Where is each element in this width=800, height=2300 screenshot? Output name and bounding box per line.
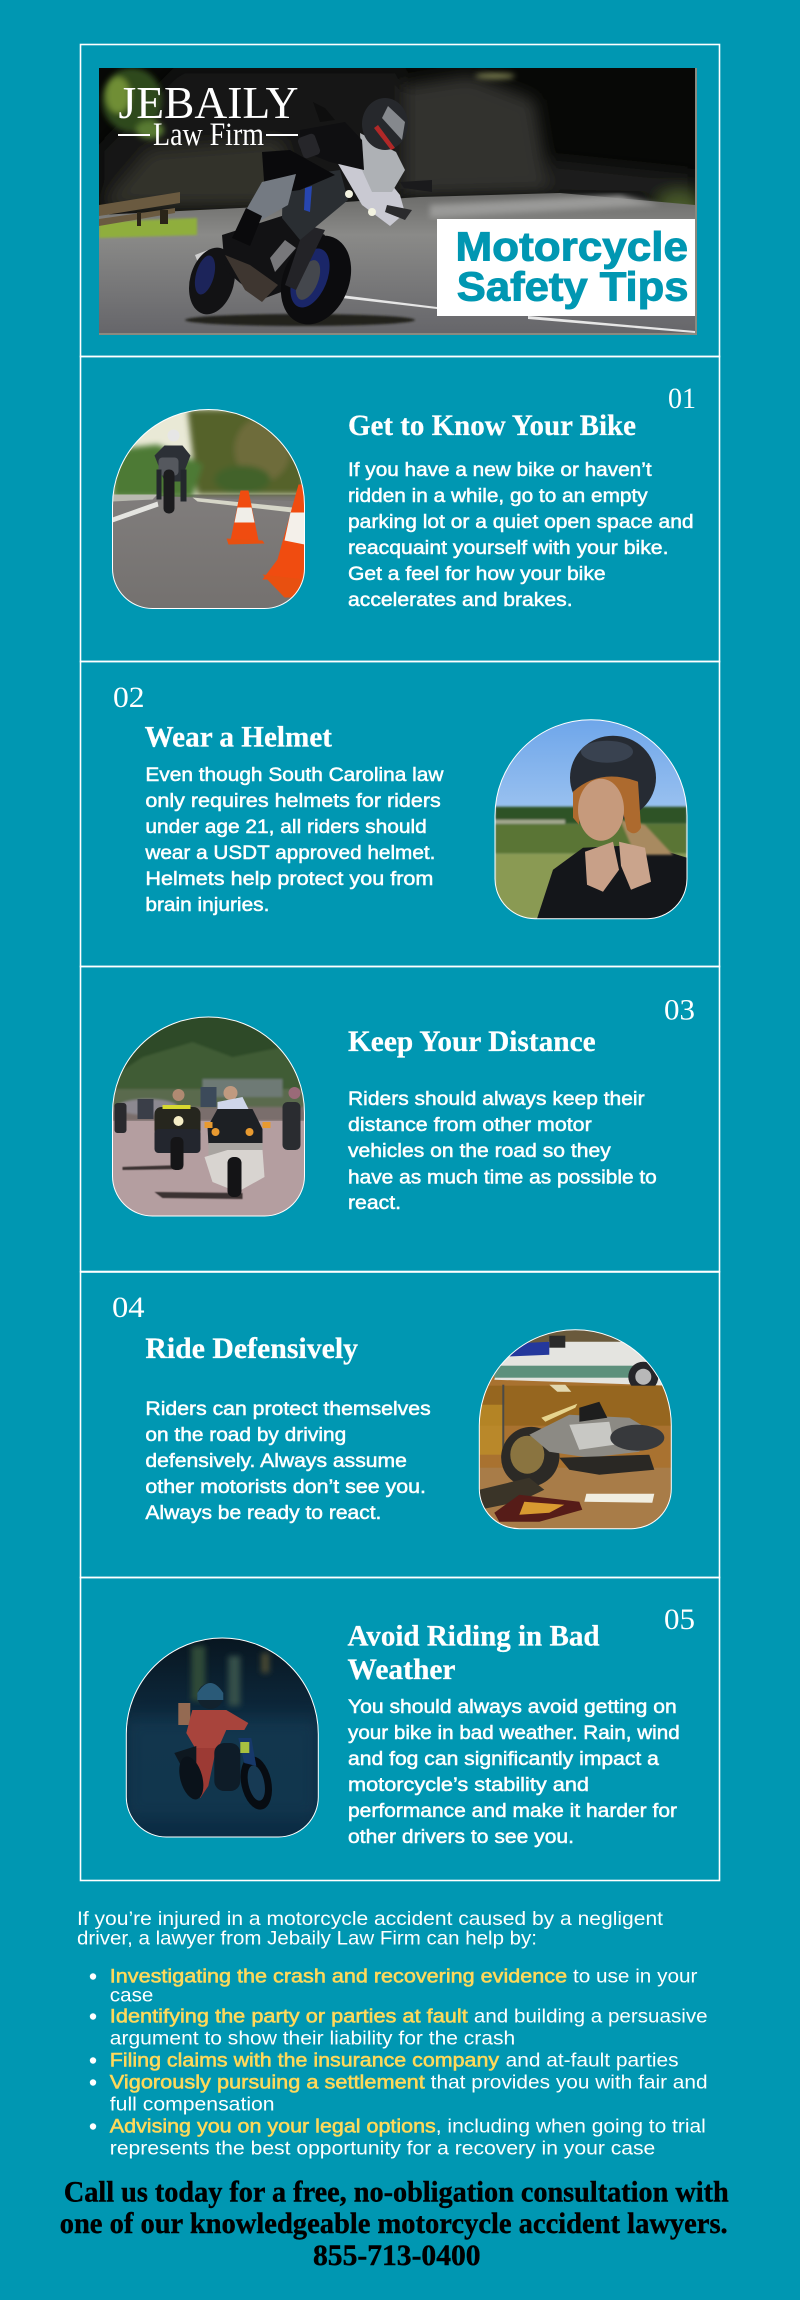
list item 5: , including when going to trial <box>436 2115 706 2137</box>
panel: header <box>80 44 720 356</box>
list item 2: argument to show their liability for the crash <box>110 2027 515 2049</box>
photo: group of motorcycles on the road <box>112 1017 304 1216</box>
body text: Helmets help protect you from <box>145 868 433 890</box>
body text: performance and make it harder for <box>348 1800 678 1822</box>
body text: If you have a new bike or haven’t <box>348 459 652 481</box>
body text: and fog can significantly impact a <box>348 1748 659 1770</box>
list item 1: Investigating the crash and recovering evidence <box>110 1965 567 1987</box>
call to action: 855-713-0400 <box>313 2240 481 2272</box>
intro paragraph: driver, a lawyer from Jebaily Law Firm can help by: <box>77 1927 537 1949</box>
panel: tip 3 <box>80 966 720 1272</box>
heading <box>348 1621 600 1686</box>
call to action: Call us today for a free, no-obligation consultation with <box>64 2177 729 2209</box>
rider <box>337 138 364 170</box>
heading: Weather <box>348 1654 456 1686</box>
body text: Even though South Carolina law <box>145 764 444 786</box>
heading: Keep Your Distance <box>348 1026 596 1058</box>
title box: Motorcycle <box>456 224 688 270</box>
list item 4: that provides you with fair and <box>431 2071 708 2093</box>
body text: motorcycle’s stability and <box>348 1774 589 1796</box>
rider right <box>204 1086 270 1197</box>
number: 04 <box>112 1291 145 1324</box>
body text: Get a feel for how your bike <box>348 563 606 585</box>
body text: vehicles on the road so they <box>348 1140 611 1162</box>
intro paragraph <box>77 1908 664 1949</box>
photo: rider approaching traffic cones <box>112 410 304 608</box>
hands <box>585 842 619 892</box>
body text: have as much time as possible to <box>348 1166 657 1188</box>
panel: tip 4 <box>80 1272 720 1578</box>
body text <box>145 1398 431 1524</box>
body text <box>144 764 444 916</box>
body text: only requires helmets for riders <box>145 790 441 812</box>
body text: under age 21, all riders should <box>145 816 427 838</box>
body text: parking lot or a quiet open space and <box>348 511 694 533</box>
body text: react. <box>348 1192 401 1214</box>
body text: other drivers to see you. <box>348 1826 574 1848</box>
engine and exhaust <box>222 215 325 300</box>
body text: reacquaint yourself with your bike. <box>348 537 668 559</box>
heading: Ride Defensively <box>145 1333 358 1365</box>
rider <box>174 1683 277 1813</box>
heading: Get to Know Your Bike <box>348 410 636 442</box>
wrecked motorcycle <box>501 1402 664 1485</box>
title box: Safety Tips <box>457 264 688 310</box>
list item 3: Filing claims with the insurance company <box>110 2049 499 2071</box>
body text: defensively. Always assume <box>145 1450 407 1472</box>
debris <box>479 1478 582 1522</box>
photo: rider in rain gear at night <box>126 1638 318 1837</box>
body text <box>348 459 694 611</box>
photo: woman fastening her helmet <box>495 720 687 919</box>
front wheel <box>280 236 352 324</box>
list item 1: to use in your <box>573 1965 698 1987</box>
police car <box>494 1336 662 1386</box>
list item 2: and building a persuasive <box>474 2005 708 2027</box>
photo: crashed motorcycle at night <box>479 1330 671 1529</box>
body text: your bike in bad weather. Rain, wind <box>348 1722 680 1744</box>
panel: tip 1 <box>80 356 720 662</box>
body text: Riders should always keep their <box>348 1088 645 1110</box>
logo <box>118 88 298 146</box>
rider left <box>154 1089 200 1170</box>
panel: tip 5 <box>80 1578 720 1880</box>
list item 4 <box>90 2071 708 2115</box>
list item 4: Vigorously pursuing a settlement <box>110 2071 425 2093</box>
tank and fairing <box>282 170 348 240</box>
list item 1 <box>90 1965 698 2006</box>
body text: wear a USDT approved helmet. <box>144 842 435 864</box>
body text: on the road by driving <box>145 1424 346 1446</box>
body text <box>348 1088 657 1214</box>
list item 3 <box>90 2049 679 2071</box>
heading: Wear a Helmet <box>145 722 332 754</box>
body text: distance from other motor <box>348 1114 592 1136</box>
list item 4: full compensation <box>110 2093 275 2115</box>
body text: other motorists don’t see you. <box>145 1476 426 1498</box>
lining and face <box>573 777 641 833</box>
list: ways a lawyer can help <box>90 1965 708 2159</box>
logo: Law Firm <box>153 117 264 153</box>
rider <box>154 430 190 514</box>
body text: You should always avoid getting on <box>348 1696 677 1718</box>
cones <box>226 484 304 598</box>
body text: brain injuries. <box>145 894 269 916</box>
body text: accelerates and brakes. <box>348 589 573 611</box>
body text: ridden in a while, go to an empty <box>348 485 648 507</box>
list item 2 <box>90 2005 708 2049</box>
call to action: one of our knowledgeable motorcycle accident lawyers. <box>60 2208 728 2240</box>
rear wheel <box>189 248 235 314</box>
title box <box>437 219 695 316</box>
number: 01 <box>668 382 696 415</box>
list item 5: Advising you on your legal options <box>110 2115 436 2137</box>
body text: Always be ready to react. <box>145 1502 381 1524</box>
helmet <box>570 736 656 820</box>
call to action <box>60 2177 729 2272</box>
jacket <box>537 845 687 919</box>
number: 03 <box>664 993 695 1026</box>
panel: tip 2 <box>80 662 720 966</box>
list item 2: Identifying the party or parties at fault <box>110 2005 468 2027</box>
number: 02 <box>113 681 145 714</box>
list item 5: represents the best opportunity for a recovery in your case <box>110 2137 655 2159</box>
body text <box>348 1696 680 1848</box>
number: 05 <box>664 1603 695 1636</box>
hero photo: motorcycle rider leaning into a curve <box>99 68 705 335</box>
list item 3: and at-fault parties <box>506 2049 679 2071</box>
logo: JEBAILY <box>118 77 298 128</box>
list item 1: case <box>110 1984 153 2006</box>
list item 5 <box>90 2115 706 2159</box>
heading: Avoid Riding in Bad <box>348 1621 600 1653</box>
body text: Riders can protect themselves <box>145 1398 431 1420</box>
background riders <box>114 1087 300 1150</box>
intro paragraph: If you’re injured in a motorcycle accident caused by a negligent <box>77 1908 664 1930</box>
